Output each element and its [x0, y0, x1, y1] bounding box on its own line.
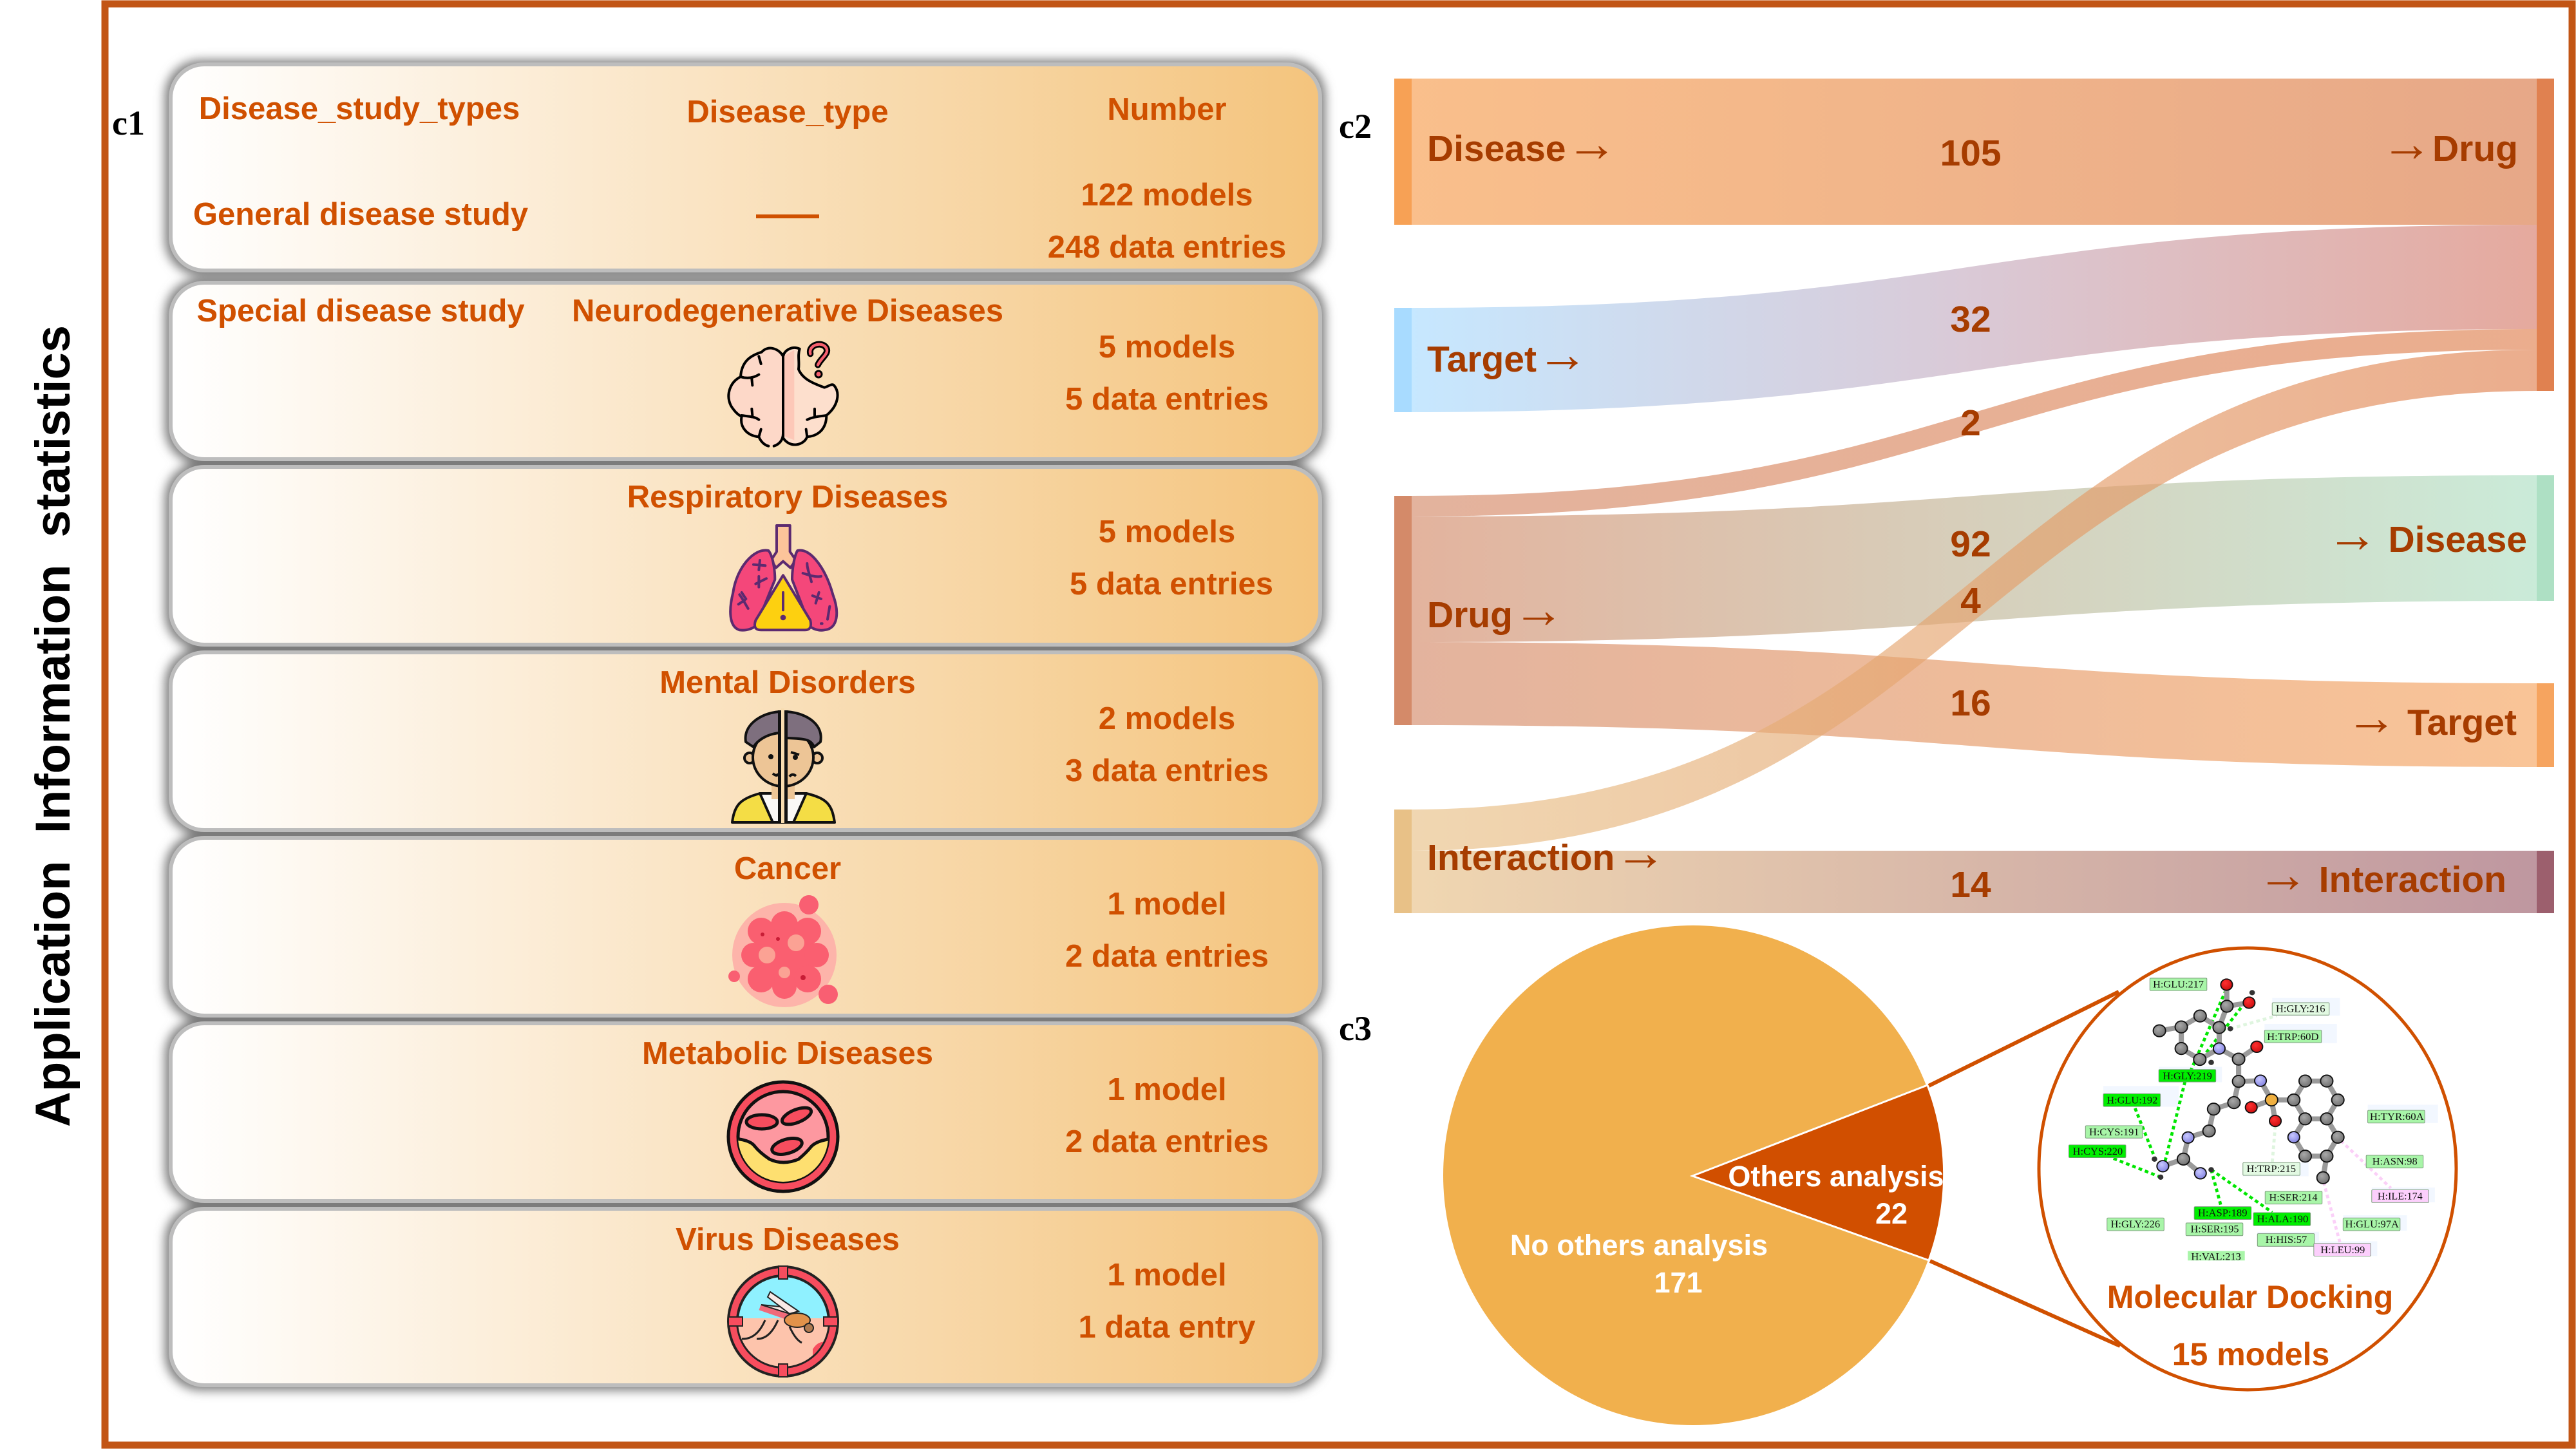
column heading: Disease_type: Disease_type	[687, 95, 889, 129]
pie label: No others analysis: No others analysis	[1510, 1229, 1768, 1262]
count: 122 models: 122 models	[1081, 178, 1253, 213]
node: left drug	[1394, 496, 1412, 725]
molecular docking diagram: H:GLY:226	[2111, 1218, 2160, 1230]
value 14: 14	[1950, 864, 1991, 905]
molecular docking diagram: H:GLY:216	[2276, 1003, 2325, 1015]
label: Drug target: →Drug	[2381, 116, 2518, 173]
count: 2 data entries: 2 data entries	[1065, 1124, 1269, 1159]
molecular docking diagram: H:LEU:99	[2320, 1244, 2365, 1256]
count: 1 model: 1 model	[1107, 1072, 1227, 1107]
special disease study label: Special disease study	[196, 294, 525, 328]
icon: split face person	[732, 708, 835, 823]
label: Disease source: Disease→	[1427, 116, 1618, 173]
count: 5 models: 5 models	[1099, 330, 1235, 365]
count: 1 data entry: 1 data entry	[1078, 1310, 1256, 1345]
pie value: 171: 171	[1654, 1266, 1703, 1299]
flow: drug to target 16	[1412, 642, 2537, 767]
panel label c3: c3	[1339, 1009, 1372, 1048]
molecular docking diagram: H:ASN:98	[2372, 1155, 2418, 1167]
dash: no disease type	[756, 214, 819, 218]
respiratory heading: Respiratory Diseases	[627, 480, 948, 515]
molecular docking diagram: H:GLU:97A	[2345, 1218, 2399, 1230]
node: right drug	[2537, 79, 2554, 391]
value 4: 4	[1960, 580, 1981, 621]
icon: lungs with warning triangle	[730, 526, 837, 630]
column heading: Disease_study_types: Disease_study_types	[199, 91, 520, 126]
node: right target	[2537, 683, 2554, 767]
row: mental disorders	[171, 652, 1320, 830]
node: left disease	[1394, 79, 1412, 225]
flow: drug to drug 2	[1412, 329, 2537, 516]
node: right interaction	[2537, 851, 2554, 913]
connector line to callout, lower	[1930, 1261, 2120, 1346]
icon: mosquito in target	[728, 1266, 838, 1377]
flow: interaction to drug 4	[1412, 350, 2537, 851]
pie slice: no others analysis	[1443, 925, 1943, 1425]
panel c3: pie chart	[1443, 925, 1944, 1425]
count: 3 data entries: 3 data entries	[1065, 753, 1269, 788]
count: 2 data entries: 2 data entries	[1065, 939, 1269, 974]
value 2: 2	[1960, 402, 1981, 444]
node: right disease	[2537, 475, 2554, 601]
pie value: 22: 22	[1875, 1197, 1908, 1230]
row: header and general disease study	[171, 64, 1320, 270]
molecular docking diagram: H:ASP:189	[2198, 1207, 2247, 1218]
pie slice: others analysis	[1692, 1085, 1944, 1260]
pie label: Others analysis: Others analysis	[1728, 1160, 1944, 1193]
panel label c1: c1	[112, 104, 145, 142]
column heading: Number: Number	[1107, 92, 1227, 127]
flow: disease to drug 105	[1412, 79, 2537, 225]
vertical title: Application Information statistics	[26, 325, 80, 1127]
row: respiratory diseases	[171, 467, 1320, 645]
molecular docking diagram: H:TRP:60D	[2267, 1030, 2319, 1043]
metabolic heading: Metabolic Diseases	[642, 1036, 933, 1071]
callout: molecular docking circle	[2039, 948, 2456, 1390]
row: virus diseases	[171, 1209, 1320, 1385]
label: Disease target: → Disease	[2327, 507, 2527, 564]
flow: interaction to interaction 14	[1412, 851, 2537, 913]
icon: blood cells in vessel	[728, 1082, 838, 1191]
molecular docking diagram: H:TYR:60A	[2370, 1110, 2424, 1122]
general disease study label: General disease study	[193, 197, 528, 232]
row: cancer	[171, 838, 1320, 1016]
value 105: 105	[1940, 133, 2002, 174]
count: 2 models: 2 models	[1099, 701, 1235, 736]
panel c2: sankey diagram	[1394, 79, 2554, 913]
label: Interaction source: Interaction→	[1427, 825, 1666, 882]
panel label c2: c2	[1339, 107, 1372, 146]
count: 248 data entries: 248 data entries	[1048, 230, 1286, 265]
mental disorders heading: Mental Disorders	[659, 665, 916, 700]
callout title: Molecular Docking: Molecular Docking	[2107, 1279, 2393, 1315]
cancer heading: Cancer	[734, 851, 841, 886]
molecular docking diagram: H:HIS:57	[2266, 1234, 2307, 1245]
label: Drug source: Drug→	[1427, 582, 1564, 639]
molecular docking diagram: H:TRP:215	[2247, 1162, 2296, 1175]
molecular docking diagram: H:ILE:174	[2378, 1190, 2423, 1202]
molecular docking diagram	[2069, 978, 2438, 1262]
molecular docking diagram: H:SER:214	[2269, 1191, 2318, 1203]
count: 1 model: 1 model	[1107, 1258, 1227, 1293]
molecular docking diagram: H:GLU:192	[2107, 1094, 2157, 1106]
molecular docking diagram: H:VAL:213	[2191, 1251, 2241, 1262]
count: 5 models: 5 models	[1099, 515, 1235, 549]
value 16: 16	[1950, 683, 1991, 724]
count: 5 data entries: 5 data entries	[1070, 567, 1273, 601]
connector line to callout, upper	[1929, 992, 2119, 1086]
molecular docking diagram: H:GLU:217	[2153, 978, 2204, 990]
molecular docking diagram: H:SER:195	[2190, 1223, 2239, 1235]
flow: target to drug 32	[1412, 225, 2537, 412]
value 92: 92	[1950, 524, 1991, 565]
molecular docking diagram: H:GLY:219	[2163, 1070, 2212, 1082]
icon: brain with question mark	[728, 345, 838, 446]
molecular docking diagram: H:CYS:191	[2089, 1126, 2139, 1138]
node: left target	[1394, 308, 1412, 412]
molecular docking diagram: H:ALA:190	[2257, 1213, 2308, 1225]
molecular docking diagram: H:CYS:220	[2073, 1145, 2123, 1157]
value 32: 32	[1950, 299, 1991, 340]
panel c1: disease table	[171, 64, 1320, 1385]
node: left interaction	[1394, 810, 1412, 913]
label: Target source: Target→	[1427, 327, 1588, 383]
row: metabolic diseases	[171, 1023, 1320, 1201]
label: Target target: → Target	[2345, 690, 2517, 746]
flow: drug to disease 92	[1412, 475, 2537, 642]
neurodegenerative heading: Neurodegenerative Diseases	[572, 294, 1003, 328]
icon: cancer cell	[728, 895, 838, 1007]
count: 1 model: 1 model	[1107, 887, 1227, 922]
count: 5 data entries: 5 data entries	[1065, 382, 1269, 417]
callout count: 15 models: 15 models	[2172, 1336, 2329, 1372]
label: Interaction target: → Interaction	[2257, 847, 2506, 904]
row: neurodegenerative diseases	[171, 283, 1320, 459]
virus heading: Virus Diseases	[676, 1222, 900, 1257]
